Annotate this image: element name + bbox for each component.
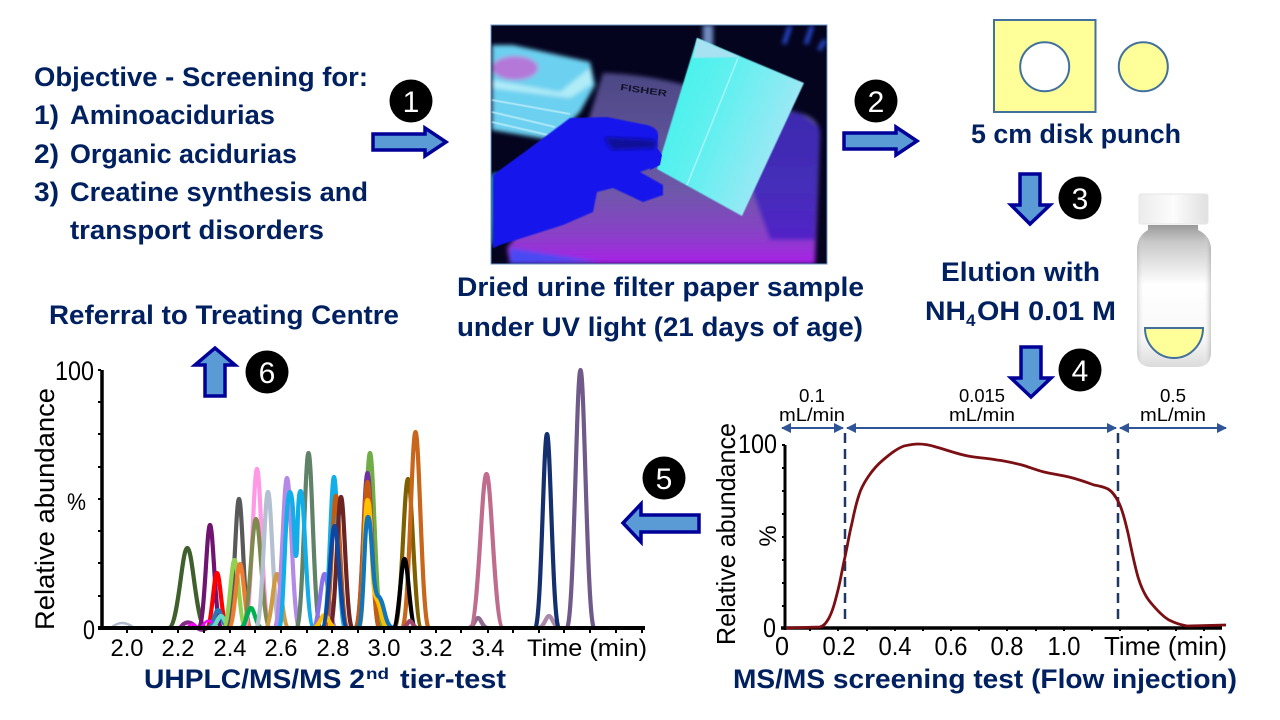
arrow 1: [373, 128, 446, 156]
flow chart axis labels: Time (min): [1104, 631, 1227, 661]
chromatogram title: tier-test: [400, 664, 506, 694]
chromatogram axis labels: Relative abundance: [30, 388, 60, 630]
flow injection trace: [786, 444, 1226, 628]
brand label on device: FISHER: [620, 82, 668, 99]
punched disk icon: [1119, 42, 1168, 91]
flow rate arrows: [782, 427, 1226, 429]
photo caption: under UV light (21 days of age): [457, 312, 863, 342]
chromatogram title: [144, 664, 506, 694]
chromatogram axis labels: 0: [83, 615, 95, 645]
flow chart axis labels: 0: [763, 613, 776, 643]
chromatogram axis labels: 3.0: [368, 635, 400, 662]
chromatogram axis labels: 3.4: [472, 635, 504, 662]
arrow 3: [1011, 174, 1050, 224]
elution text: [925, 257, 1116, 330]
elution text: Elution with: [941, 257, 1100, 287]
photo: filter paper under UV light: [491, 25, 827, 264]
chart: flow injection profile: [711, 423, 1227, 661]
punched filter paper icon: [994, 20, 1096, 112]
chromatogram axis labels: 2.2: [162, 635, 194, 662]
step 5 badge: 5: [656, 463, 672, 496]
flow rate labels: 0.015: [959, 386, 1005, 406]
elution text: NH: [925, 296, 966, 326]
chart: UHPLC chromatogram: [30, 356, 647, 662]
flow chart axis labels: [711, 423, 1227, 661]
chromatogram axis labels: 2.6: [264, 635, 298, 662]
chromatogram axis labels: 100: [55, 356, 94, 386]
flow chart axis labels: Relative abundance: [711, 423, 741, 645]
objective text block: Organic acidurias: [70, 139, 297, 169]
chromatogram axis labels: 2.4: [214, 635, 246, 662]
objective text block: 1): [34, 100, 59, 130]
chromatogram axis labels: 3.2: [420, 635, 452, 662]
arrow 4: [1011, 347, 1051, 397]
flow rate labels: mL/min: [949, 405, 1015, 425]
flow chart axis labels: 0: [775, 631, 789, 661]
flow chart axis labels: 0.4: [878, 631, 912, 661]
flow chart axis labels: 0.8: [990, 631, 1024, 661]
step 6 badge: [246, 350, 288, 394]
arrow 5: [623, 504, 699, 542]
objective text block: 2): [34, 139, 59, 169]
flow chart axis labels: 0.2: [822, 631, 856, 661]
step 2 badge: [854, 80, 898, 122]
objective text block: Creatine synthesis and: [70, 177, 368, 207]
step 4 badge: 4: [1072, 355, 1088, 388]
flow chart axis labels: 0.6: [934, 631, 968, 661]
chromatogram title: UHPLC/MS/MS 2: [144, 664, 365, 694]
objective text block: [34, 62, 368, 245]
objective text block: transport disorders: [70, 215, 324, 245]
step 4 badge: [1058, 348, 1102, 392]
flow chart title: MS/MS screening test (Flow injection): [733, 664, 1237, 694]
chromatogram axis labels: 2.8: [316, 635, 350, 662]
flow rate labels: [779, 386, 1206, 425]
chromatogram axis labels: Time (min): [527, 635, 647, 662]
flow rate labels: 0.5: [1160, 386, 1186, 406]
vial with disk: [1137, 194, 1211, 367]
punch caption: 5 cm disk punch: [971, 119, 1181, 149]
step 1 badge: [390, 80, 432, 122]
chromatogram peaks: [111, 370, 594, 630]
chromatogram axis labels: 2.0: [110, 635, 144, 662]
chromatogram title: nd: [366, 666, 389, 683]
photo caption: Dried urine filter paper sample: [457, 272, 864, 302]
objective text block: Objective - Screening for:: [34, 62, 368, 92]
flow rate labels: 0.1: [799, 386, 825, 406]
arrow 2: [844, 127, 917, 155]
chromatogram axis labels: [30, 356, 647, 662]
flow chart axis labels: 1.0: [1048, 631, 1080, 661]
flow chart axis labels: %: [755, 525, 782, 547]
step 1 badge: 1: [403, 86, 419, 119]
flow rate labels: mL/min: [779, 405, 845, 425]
elution text: OH 0.01 M: [977, 296, 1116, 326]
flow chart axis labels: 100: [738, 429, 777, 459]
step 2 badge: 2: [868, 86, 884, 119]
arrow 6: [195, 348, 235, 396]
chromatogram axis labels: %: [67, 489, 86, 516]
objective text block: 3): [34, 177, 59, 207]
photo border: [491, 25, 827, 264]
elution text: 4: [966, 311, 976, 330]
step 5 badge: [642, 456, 686, 500]
photo caption: [457, 272, 864, 342]
flow rate labels: mL/min: [1140, 405, 1206, 425]
step 3 badge: 3: [1072, 183, 1088, 216]
referral heading: Referral to Treating Centre: [49, 300, 399, 330]
objective text block: Aminoacidurias: [70, 100, 275, 130]
step 6 badge: 6: [259, 357, 275, 390]
step 3 badge: [1058, 176, 1102, 220]
